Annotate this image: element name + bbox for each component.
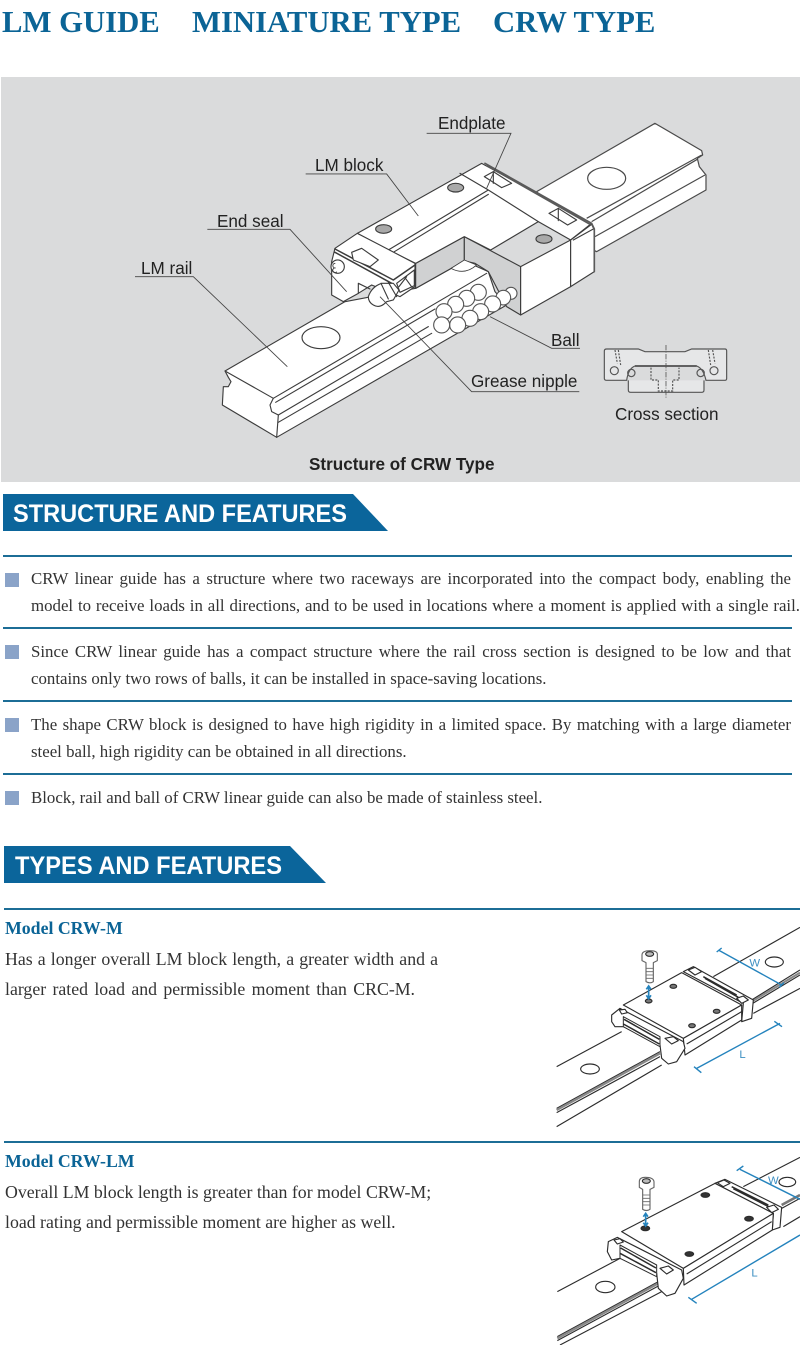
description (5, 949, 438, 999)
panel: structure diagram (1, 77, 800, 482)
feature 3: The shape CRW block is designed to have high rigidity in a limited space. By matching with a large diameter (31, 715, 791, 734)
feature 2: Since CRW linear guide has a compact structure where the rail cross section is designed to be low and that (31, 642, 791, 661)
title: CRW TYPE (493, 5, 655, 39)
grease nipple (368, 283, 399, 306)
panel: model CRW-M text (5, 918, 438, 999)
dimension labels (751, 1175, 779, 1280)
illustration: CRW-M guide (556, 926, 800, 1128)
dimension labels: L (751, 1268, 758, 1280)
panel: features list (3, 555, 800, 807)
feature 1: CRW linear guide has a structure where two raceways are incorporated into the compact body, enabling the (31, 569, 791, 588)
label: LM rail: LM rail (141, 259, 192, 278)
diagram: LM rail and block (222, 123, 706, 437)
dimension labels: W (768, 1175, 779, 1187)
heading: structure and features: STRUCTURE AND FEATURES (13, 500, 347, 528)
panel: model CRW-LM text (5, 1151, 431, 1232)
divider: model CRW-M (4, 908, 800, 910)
feature 3: steel ball, high rigidity can be obtained in all directions. (31, 742, 407, 761)
label: End seal: End seal (217, 212, 284, 231)
divider: model CRW-LM (4, 1141, 800, 1143)
model name: Model CRW-M (5, 918, 123, 938)
label: Endplate: Endplate (438, 114, 505, 133)
description (5, 1182, 431, 1232)
title (2, 5, 655, 39)
heading: types and features (4, 846, 326, 883)
dimension labels (739, 958, 760, 1061)
illustration: CRW-LM guide (556, 1156, 800, 1345)
end seal (332, 233, 415, 302)
description: Has a longer overall LM block length, a greater width and a (5, 949, 438, 969)
feature 1 (5, 569, 800, 615)
caption: Structure of CRW Type: Structure of CRW Type (309, 455, 495, 474)
description: Overall LM block length is greater than for model CRW-M; (5, 1182, 431, 1202)
block front face (521, 240, 571, 315)
heading: types and features: TYPES AND FEATURES (15, 852, 282, 880)
description: larger rated load and permissible moment than CRC-M. (5, 979, 415, 999)
leader lines (135, 133, 580, 392)
balls (434, 284, 517, 333)
label: LM block: LM block (315, 156, 384, 175)
description: load rating and permissible moment are higher as well. (5, 1212, 396, 1232)
dimension labels: L (739, 1049, 746, 1061)
near rail body (222, 261, 507, 437)
title: MINIATURE TYPE (192, 5, 461, 39)
cross section drawing (604, 345, 727, 398)
label: Grease nipple: Grease nipple (471, 372, 577, 391)
feature 4: Block, rail and ball of CRW linear guide can also be made of stainless steel. (31, 788, 542, 807)
title: LM GUIDE (2, 5, 160, 39)
feature 1: model to receive loads in all directions, and to be used in locations where a moment is applied with a single rail. (31, 596, 800, 615)
far rail section (537, 123, 706, 252)
block top face (357, 163, 592, 263)
label: Cross section: Cross section (615, 405, 719, 424)
cut-out recess (416, 237, 464, 288)
heading: structure and features (3, 494, 388, 531)
model name: Model CRW-LM (5, 1151, 135, 1171)
dimension labels: W (749, 958, 760, 970)
feature 2 (5, 642, 791, 688)
feature 3 (5, 715, 791, 761)
label: Ball: Ball (551, 331, 580, 350)
feature 2: contains only two rows of balls, it can be installed in space-saving locations. (31, 669, 546, 688)
endplate (571, 224, 594, 287)
